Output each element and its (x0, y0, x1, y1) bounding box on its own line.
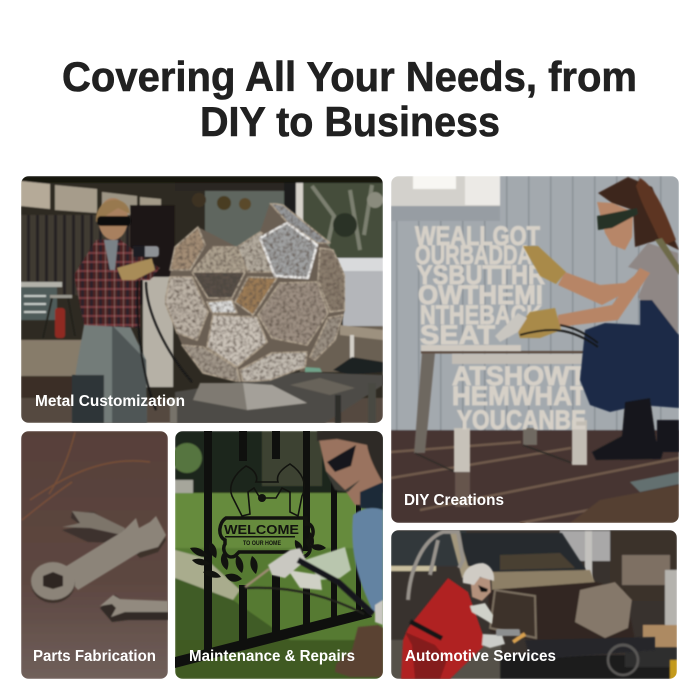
icon: laser-cut letter sculpture: ATSHOWT (452, 361, 586, 391)
icon: stripped car body (408, 532, 655, 675)
icon: laser-cut letter sculpture: YOUCANBE (457, 405, 586, 435)
icon: woman with laser welder (495, 177, 679, 460)
icon: wrenches (31, 511, 168, 622)
label: DIY Creations: DIY Creations (404, 492, 504, 509)
workshop photo: background (21, 176, 383, 423)
title: Covering All Your Needs, from (62, 53, 637, 100)
label: Metal Customization: Metal Customization (35, 393, 185, 410)
icon: laser-cut letter sculpture: WEALLGOT (415, 221, 540, 251)
panel: Automotive Services (391, 530, 677, 679)
panel: Maintenance & Repairs (172, 431, 383, 679)
icon: welcome sign (190, 464, 326, 582)
icon: mechanic in red suit (401, 563, 520, 679)
label: Maintenance & Repairs: Maintenance & Repairs (189, 648, 355, 665)
icon: laser-cut letter sculpture: HEMWHAT (452, 381, 586, 411)
icon: laser-cut letter sculpture: OURBADDA (415, 240, 532, 270)
room photo: wall, window and floor (391, 176, 679, 523)
panel: Metal Customization (21, 176, 383, 423)
icon: welder in plaid shirt (72, 198, 192, 423)
icon: welcome sign: WELCOME (224, 522, 299, 537)
icon: laser-cut letter sculpture: SEAT (420, 320, 496, 350)
icon: welcome sign: TO OUR HOME (243, 541, 281, 547)
label: Automotive Services: Automotive Services (405, 648, 556, 665)
garden photo background (172, 431, 383, 679)
panel: Parts Fabrication (21, 431, 168, 679)
icon: laser-cut letter sculpture: YSBUTTHR (417, 260, 545, 290)
icon: metal sphere sculpture (165, 203, 345, 382)
panel: DIY Creations (391, 176, 679, 523)
title (62, 53, 637, 145)
title: DIY to Business (200, 98, 500, 145)
icon: laser-cut letter sculpture: OWTHEMI (418, 280, 543, 310)
icon: black fence (175, 431, 372, 668)
garage photo background (391, 530, 677, 679)
icon: laser-cut letter sculpture: NTHEBACK (420, 300, 542, 330)
icon: laser-cut letter sculpture (415, 221, 586, 435)
icon: chair legs (414, 351, 587, 507)
icon: man with welding gun (245, 431, 383, 677)
label: Parts Fabrication: Parts Fabrication (33, 648, 156, 665)
icon: table (170, 367, 383, 423)
rusty steel surface (21, 431, 168, 679)
